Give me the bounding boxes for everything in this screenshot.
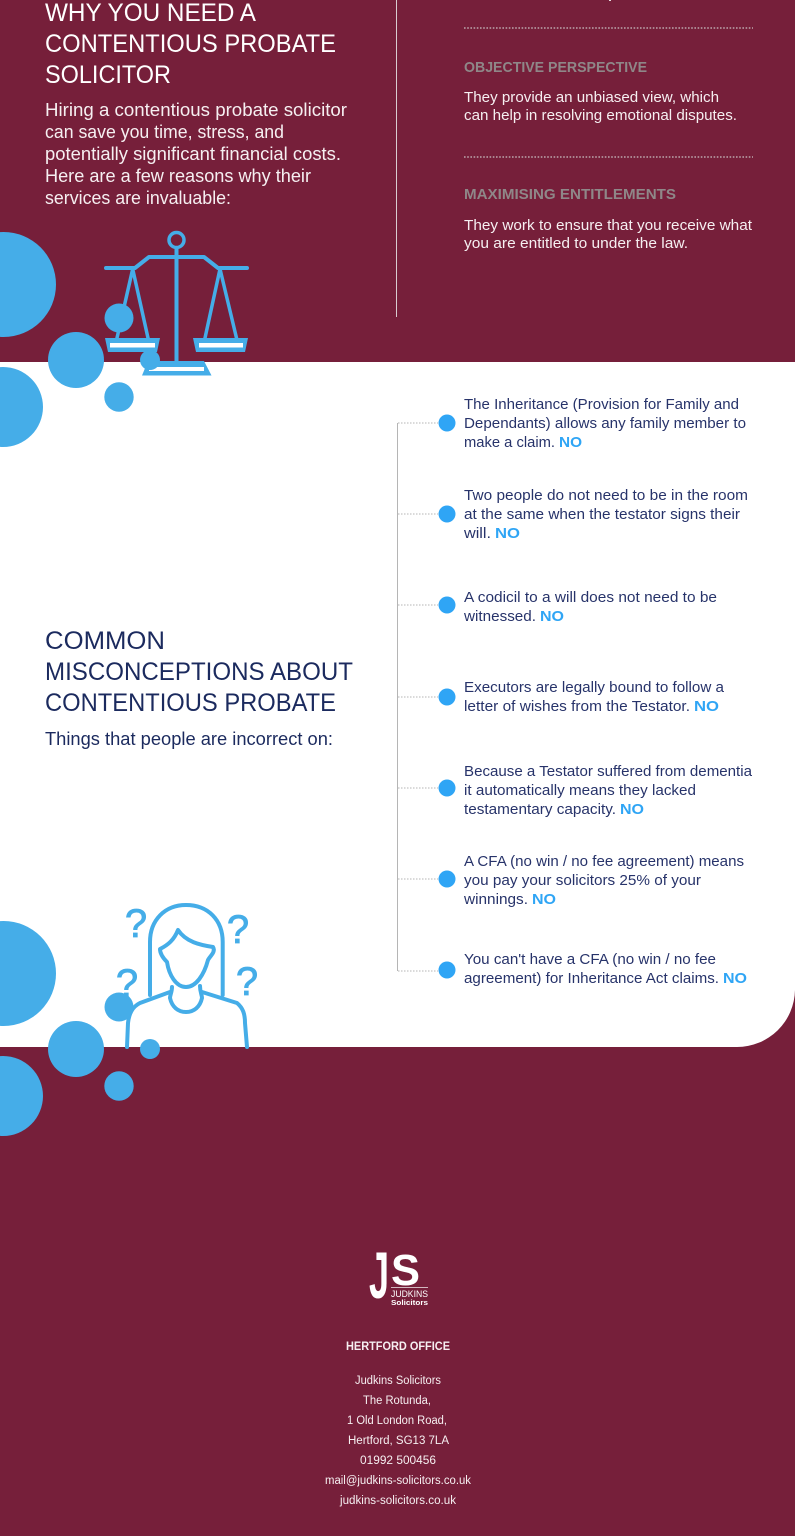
list item 1: make a claim. xyxy=(464,434,555,451)
icon: confused person with question marks xyxy=(116,902,258,1047)
heading: common misconceptions: CONTENTIOUS PROBATE xyxy=(45,689,336,717)
list item 5: NO xyxy=(620,801,644,818)
list item 4: Executors are legally bound to follow a xyxy=(464,679,725,696)
text block: objective perspective: They provide an unbiased view, which xyxy=(464,89,719,106)
icon: confused person with question marks: ? xyxy=(116,962,138,1006)
heading: common misconceptions: MISCONCEPTIONS ABOUT xyxy=(45,658,353,686)
list item 2: will. xyxy=(463,525,491,542)
text block: contact details: Judkins Solicitors xyxy=(355,1375,441,1387)
footer heading: Hertford office: HERTFORD OFFICE xyxy=(346,1341,450,1353)
decorative circles: lower group xyxy=(0,921,160,1136)
text block: introduction xyxy=(45,100,347,208)
logo: Judkins Solicitors: JUDKINS xyxy=(391,1289,428,1299)
text block: objective perspective: OBJECTIVE PERSPECTIVE xyxy=(464,59,647,76)
list item 1: The Inheritance (Provision for Family and xyxy=(464,396,739,413)
text block: contact details: 1 Old London Road, xyxy=(347,1415,447,1427)
list item 5: it automatically means they lacked xyxy=(464,782,696,799)
text block: contact details: Hertford, SG13 7LA xyxy=(348,1435,449,1447)
text block: objective perspective: can help in resolving emotional disputes. xyxy=(464,107,737,124)
list item 3: witnessed. xyxy=(463,608,536,625)
text block: maximising entitlements: MAXIMISING ENTITLEMENTS xyxy=(464,186,676,203)
list item 6 xyxy=(438,853,744,908)
text block: introduction: Here are a few reasons why their xyxy=(45,166,311,186)
list item 5: testamentary capacity. xyxy=(464,801,616,818)
logo: Judkins Solicitors: Solicitors xyxy=(391,1298,428,1307)
list item 1 xyxy=(438,396,746,451)
text block: introduction: Hiring a contentious probate solicitor xyxy=(45,100,347,120)
list item 2: Two people do not need to be in the room xyxy=(464,487,748,504)
list item 1: NO xyxy=(559,434,582,451)
list item 4: NO xyxy=(694,698,719,715)
icon: confused person with question marks: ? xyxy=(227,908,249,952)
text block: introduction: can save you time, stress, and xyxy=(45,122,284,142)
decorative circles: top group xyxy=(0,232,160,447)
heading: common misconceptions xyxy=(45,627,353,717)
heading: why you need a solicitor: SOLICITOR xyxy=(45,61,171,89)
text block: contact details: mail@judkins-solicitors.co.uk xyxy=(325,1475,471,1487)
text block: contact details xyxy=(325,1375,471,1507)
logo: Judkins Solicitors: J xyxy=(369,1238,389,1312)
list item 2: NO xyxy=(495,525,520,542)
list item 2: at the same when the testator signs their xyxy=(464,506,740,523)
text block: objective perspective xyxy=(464,59,737,124)
list item 4: letter of wishes from the Testator. xyxy=(464,698,690,715)
heading: why you need a solicitor xyxy=(45,0,336,89)
logo: Judkins Solicitors: S xyxy=(391,1246,420,1295)
icon: confused person with question marks: ? xyxy=(125,902,147,946)
text block: introduction: services are invaluable: xyxy=(45,188,231,208)
heading: why you need a solicitor: CONTENTIOUS PROBATE xyxy=(45,30,336,58)
text block: contact details: The Rotunda, xyxy=(363,1395,431,1407)
icon: scales of justice xyxy=(105,232,248,376)
logo: Judkins Solicitors xyxy=(369,1238,428,1312)
icon: confused person with question marks: ? xyxy=(236,960,258,1004)
list item 5: Because a Testator suffered from dementia xyxy=(464,763,753,780)
list item 6: A CFA (no win / no fee agreement) means xyxy=(464,853,744,870)
text block: maximising entitlements xyxy=(464,186,753,252)
text block: contact details: 01992 500456 xyxy=(360,1455,436,1467)
list item 7 xyxy=(438,951,747,987)
list item 6: NO xyxy=(532,891,556,908)
list item 7: agreement) for Inheritance Act claims. xyxy=(464,970,719,987)
list item 3: NO xyxy=(540,608,564,625)
text block: contact details: judkins-solicitors.co.uk xyxy=(339,1495,456,1507)
list item 3 xyxy=(438,589,717,625)
text block: introduction: potentially significant financial costs. xyxy=(45,144,341,164)
heading: common misconceptions: COMMON xyxy=(45,627,165,655)
list item 1: Dependants) allows any family member to xyxy=(464,415,746,432)
list item 6: winnings. xyxy=(463,891,528,908)
text block: maximising entitlements: you are entitled to under the law. xyxy=(464,235,688,252)
list item 5 xyxy=(438,763,753,818)
panel: misconceptions white background xyxy=(0,362,795,1047)
list item 3: A codicil to a will does not need to be xyxy=(464,589,717,606)
text block: misconceptions subheading: Things that people are incorrect on: xyxy=(45,729,333,749)
list item 7: You can't have a CFA (no win / no fee xyxy=(464,951,716,968)
list item 2 xyxy=(438,487,748,542)
list item 4 xyxy=(438,679,725,715)
list item 7: NO xyxy=(723,970,747,987)
text block: maximising entitlements: They work to ensure that you receive what xyxy=(464,217,753,234)
list item 6: you pay your solicitors 25% of your xyxy=(464,872,701,889)
